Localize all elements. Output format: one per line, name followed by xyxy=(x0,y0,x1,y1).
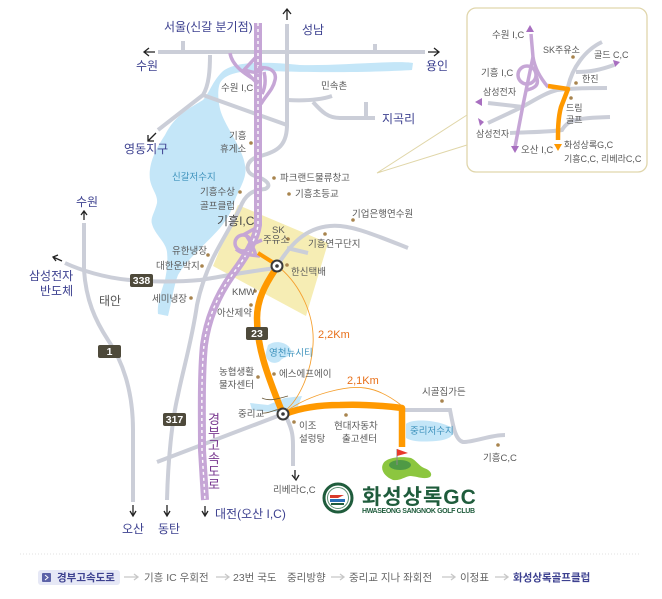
direction labels: 수원 xyxy=(76,195,98,209)
inset labels: SK주유소 xyxy=(543,45,580,55)
inset labels: 기흥 I,C xyxy=(481,67,513,79)
direction labels: 지곡리 xyxy=(382,112,415,126)
distance labels: 2,2Km xyxy=(318,329,350,341)
place labels: 물자센터 xyxy=(219,380,254,391)
divider xyxy=(20,553,640,555)
route shield 1: 1 xyxy=(107,346,113,358)
inset labels: 골드 C,C xyxy=(594,50,629,60)
inset dots xyxy=(569,55,578,100)
place labels: 기흥초등교 xyxy=(295,188,339,200)
Suwon IC interchange xyxy=(230,53,275,104)
place labels: 중리교 xyxy=(238,409,264,420)
expressway label: 고 xyxy=(208,438,220,453)
place labels: 골프클럽 xyxy=(200,201,235,212)
water labels: 신갈저수지 xyxy=(172,171,216,183)
direction labels: 서울(신갈 분기점) xyxy=(164,20,253,34)
water: Jungri reservoir xyxy=(406,421,453,442)
inset map panel xyxy=(467,8,647,172)
place labels: 기흥연구단지 xyxy=(308,238,360,250)
water labels: 중리저수지 xyxy=(410,426,454,437)
direction labels: 영동지구 xyxy=(124,142,168,156)
route shield 317: 317 xyxy=(166,414,183,426)
golf club name: 화성상록GC xyxy=(362,486,477,509)
place labels: 현대자동차 xyxy=(334,420,378,432)
directions start pill xyxy=(38,570,120,585)
junction marker: Hanjin xyxy=(272,260,282,272)
place dots xyxy=(189,141,500,447)
direction labels: 성남 xyxy=(302,23,324,37)
distance arcs xyxy=(280,268,401,410)
place labels: 기흥C,C xyxy=(483,452,517,464)
direction labels: 대전(오산 I,C) xyxy=(215,507,286,521)
inset labels xyxy=(476,30,642,164)
inset labels: 한진 xyxy=(582,74,599,84)
inset labels: 기흥C,C, 리베라C,C xyxy=(564,153,642,164)
inset labels: 드림 xyxy=(566,102,583,113)
place labels: 아산제약 xyxy=(217,307,252,319)
water labels: 영천뉴시티 xyxy=(269,348,313,359)
inset grey roads xyxy=(488,42,614,133)
Giheung IC interchange xyxy=(235,228,262,256)
grey roads xyxy=(65,24,505,502)
place labels: 수원 I,C xyxy=(221,83,253,94)
directions bar: 화성상록골프클럽 xyxy=(513,571,590,584)
place labels: KMW xyxy=(232,287,255,298)
place labels: 이조 xyxy=(299,421,317,432)
inset labels: 화성상록G,C xyxy=(564,140,614,150)
place labels: 세미냉장 xyxy=(152,294,187,305)
directions bar xyxy=(38,570,590,585)
expressway label: 경 xyxy=(208,412,220,427)
expressway label: 도 xyxy=(208,464,220,479)
directions start pill: 경부고속도로 xyxy=(57,572,115,584)
directions bar: 이정표 xyxy=(460,572,489,584)
place labels: 리베라C,C xyxy=(273,485,316,496)
place labels: 휴게소 xyxy=(220,144,246,155)
place labels: 파크랜드물류창고 xyxy=(280,173,350,184)
place labels: 기흥수상 xyxy=(200,186,235,198)
distance labels xyxy=(318,329,379,387)
directions bar: 23번 국도 xyxy=(233,572,277,584)
inset labels: 수원 I,C xyxy=(492,30,524,41)
expressway label xyxy=(208,412,220,492)
direction labels: 반도체 xyxy=(40,284,73,298)
place labels: 유한냉장 xyxy=(172,246,207,257)
inset arrows xyxy=(475,25,620,153)
direction labels: 수원 xyxy=(136,59,158,73)
place labels: 민속촌 xyxy=(321,81,347,92)
place labels xyxy=(152,81,517,496)
direction labels: 오산 xyxy=(122,522,144,536)
place labels: SK xyxy=(272,225,285,236)
route shield 338: 338 xyxy=(133,275,150,287)
place labels: 출고센터 xyxy=(342,434,377,445)
inset orange route xyxy=(548,86,568,140)
directions arrows xyxy=(124,574,508,580)
yellow area: Giheung xyxy=(213,205,328,316)
inset labels: 삼성전자 xyxy=(476,129,510,139)
directions steps: 기흥 IC 우회전 xyxy=(144,571,209,584)
water labels xyxy=(172,171,454,437)
place labels: 한신택배 xyxy=(291,267,326,278)
expressway label: 속 xyxy=(208,451,220,466)
junction marker: Jungri bridge xyxy=(278,408,288,420)
route shield 1 xyxy=(98,345,121,358)
expressway xyxy=(202,23,258,500)
golf club logo xyxy=(324,484,352,512)
place labels: 시골집가든 xyxy=(422,386,466,398)
directions bar: 중리방향 xyxy=(287,572,326,584)
expressway label: 부 xyxy=(208,425,220,440)
water: Yeongcheon pond xyxy=(266,342,291,363)
inset labels: 삼성전자 xyxy=(483,87,517,97)
inset labels: 오산 I,C xyxy=(521,145,553,156)
stream crossing marks xyxy=(262,396,288,413)
place labels: 기흥I,C xyxy=(217,214,255,228)
route shield 23: 23 xyxy=(251,328,263,340)
place labels: 에스에프에이 xyxy=(279,369,331,380)
water: Jungri stream xyxy=(250,396,302,412)
direction labels: 삼성전자 xyxy=(29,269,73,283)
place labels: 기업은행연수원 xyxy=(352,208,413,220)
callout lines to inset xyxy=(377,115,467,173)
direction labels xyxy=(29,20,448,536)
place labels: 설렁탕 xyxy=(299,433,325,445)
place labels: 기흥 xyxy=(229,130,247,142)
inset labels: 골프 xyxy=(566,115,583,125)
golf course icon xyxy=(382,449,431,480)
distance labels: 2,1Km xyxy=(347,375,379,387)
place labels: 주유소 xyxy=(263,235,289,246)
directions bar: 중리교 지나 좌회전 xyxy=(349,572,432,584)
arrows on road ends xyxy=(53,9,439,516)
golf club name: HWASEONG SANGNOK GOLF CLUB xyxy=(362,508,475,515)
orange route xyxy=(257,253,402,447)
water: Singal reservoir and river xyxy=(150,62,413,316)
route shield 23 xyxy=(246,327,268,340)
place labels: 농협생활 xyxy=(219,366,254,378)
expressway label: 로 xyxy=(208,477,220,492)
direction labels: 태안 xyxy=(99,294,121,308)
direction labels: 용인 xyxy=(426,59,448,73)
place labels: 대한운박지 xyxy=(156,261,200,272)
inset purple roads xyxy=(515,34,548,147)
direction labels: 동탄 xyxy=(158,522,180,536)
